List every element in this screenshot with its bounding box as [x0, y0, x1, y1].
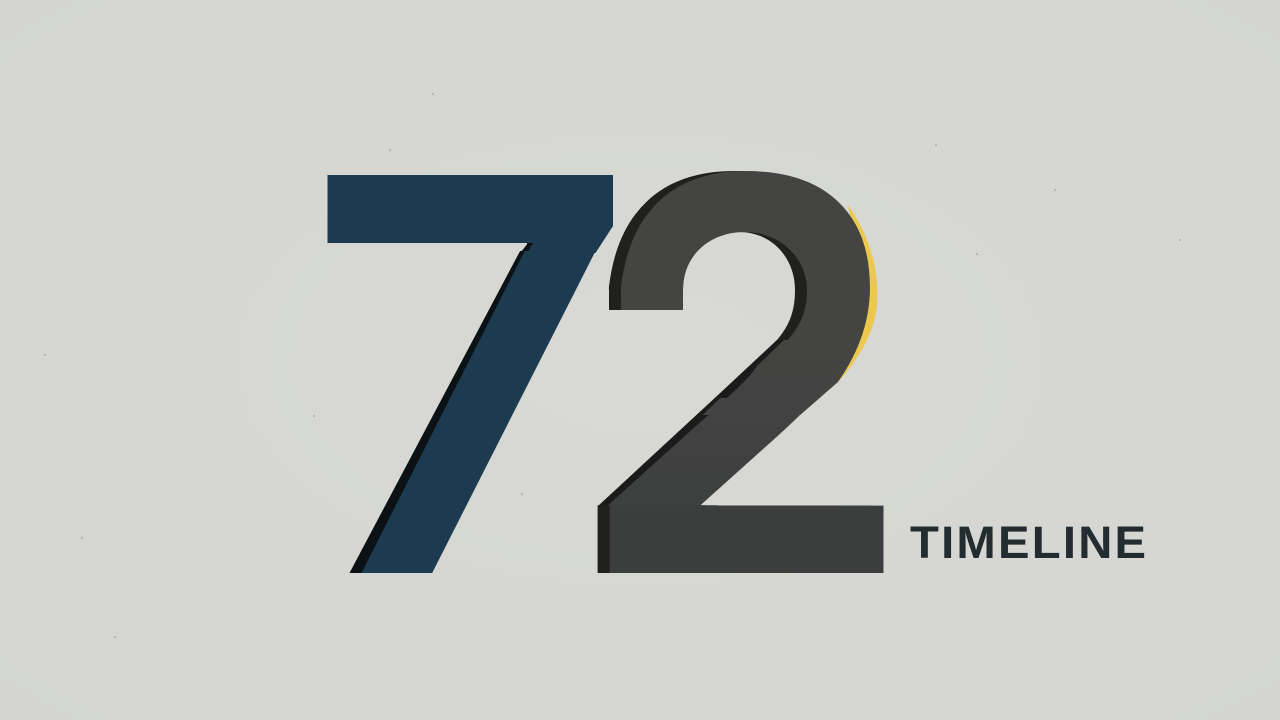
numeral 7: 7	[280, 66, 666, 702]
numeral 2 with yellow arc accent: 2	[557, 120, 916, 689]
numeral 2 with yellow arc accent: 2	[587, 47, 885, 718]
timeline label: TIMELINE	[910, 517, 1146, 568]
numeral 7: 7	[293, 66, 655, 702]
numeral 2 with yellow arc accent: 2	[599, 47, 897, 718]
background speckles	[44, 93, 1181, 638]
numeral 2 with yellow arc accent: 2	[569, 120, 928, 689]
numeral 2 with yellow arc accent: 2	[557, 121, 913, 689]
numeral 2 with yellow arc accent	[598, 171, 884, 573]
numeral 7	[328, 175, 613, 573]
numeral 7: 7	[265, 68, 666, 703]
infographic canvas	[44, 93, 1181, 638]
yellow arc accent	[830, 205, 877, 382]
